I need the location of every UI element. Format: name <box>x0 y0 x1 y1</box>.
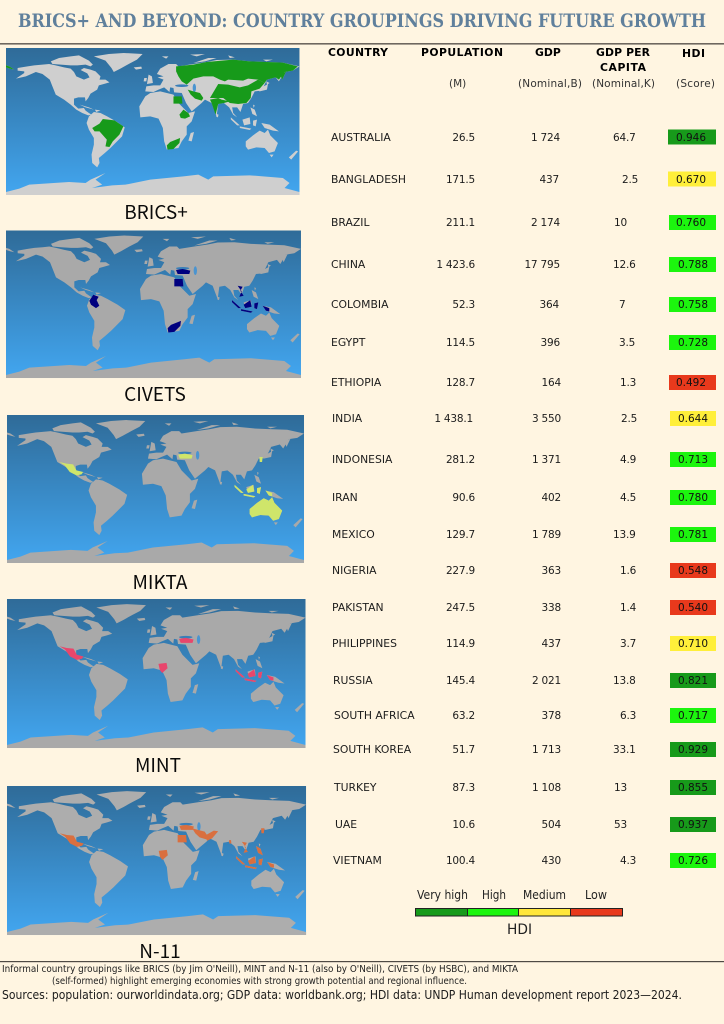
HDI legend: High <box>482 887 506 902</box>
row: UAE: 10.6 <box>452 819 476 831</box>
row: China: 1 423.6 <box>436 259 476 271</box>
row: China: 12.6 <box>613 259 636 271</box>
row: Colombia: 7 <box>619 299 625 311</box>
row: Indonesia: 0.713 <box>678 454 708 466</box>
row: Pakistan: 1.4 <box>620 602 637 614</box>
row: Nigeria: 363 <box>542 565 561 577</box>
row: Turkey: 0.855 <box>678 782 708 794</box>
HDI legend <box>416 887 622 938</box>
HDI legend: Very high <box>417 887 468 902</box>
row: Colombia <box>331 297 716 312</box>
row: Iran: 90.6 <box>452 492 476 504</box>
row: Indonesia: INDONESIA <box>332 453 393 466</box>
row: South Africa: 378 <box>542 710 561 722</box>
row: Vietnam: 100.4 <box>446 855 476 867</box>
table header: (Score) <box>676 78 715 90</box>
row: Bangladesh: 437 <box>540 174 559 186</box>
row: Ethiopia <box>331 375 716 390</box>
row: Bangladesh <box>331 172 716 186</box>
panel: N-11 map <box>7 786 306 935</box>
row: Indonesia: 1 371 <box>532 454 561 466</box>
row: Brazil: 10 <box>614 217 627 229</box>
heading: CIVETS: CIVETS <box>124 380 186 407</box>
row: Colombia: 52.3 <box>452 299 475 311</box>
footnote text: (self-formed) highlight emerging economies with strong growth potential and regional influence. <box>52 976 467 987</box>
row: UAE: UAE <box>335 818 357 831</box>
row: Brazil: 211.1 <box>446 217 475 229</box>
row: South Korea <box>333 742 716 757</box>
row: Pakistan: 338 <box>542 602 561 614</box>
row: Vietnam <box>333 853 716 868</box>
row: Egypt: 396 <box>541 337 561 349</box>
table header: COUNTRY <box>328 46 388 59</box>
row: Mexico: 13.9 <box>613 529 636 541</box>
row: India <box>332 411 716 426</box>
row: Turkey: 1 108 <box>532 782 561 794</box>
HDI legend: Medium <box>523 887 566 902</box>
table header: (M) <box>449 78 466 90</box>
table header: (Nominal,K) <box>592 78 655 90</box>
row: Indonesia: 281.2 <box>446 454 475 466</box>
row: Pakistan: PAKISTAN <box>332 601 384 614</box>
row: Ethiopia: 164 <box>542 377 562 389</box>
table header <box>328 46 715 90</box>
row: Australia <box>331 130 716 144</box>
row: Philippines: 114.9 <box>446 638 475 650</box>
row: UAE: 504 <box>542 819 562 831</box>
row: Australia: 1 724 <box>531 132 561 144</box>
row: Brazil: 0.760 <box>676 217 706 229</box>
row: Mexico: 0.781 <box>678 529 708 541</box>
row: Philippines: 437 <box>542 638 561 650</box>
row: Colombia: 364 <box>540 299 560 311</box>
row: Ethiopia: ETHIOPIA <box>331 376 382 389</box>
row: Bangladesh: 171.5 <box>446 174 475 186</box>
row: Russia: 13.8 <box>613 675 636 687</box>
row: India: 0.644 <box>678 413 708 425</box>
row: Bangladesh: 2.5 <box>622 174 638 186</box>
HDI legend: Low <box>585 887 607 902</box>
table header: CAPITA <box>600 61 647 74</box>
row: Mexico: 129.7 <box>446 529 475 541</box>
row: India: 3 550 <box>532 413 561 425</box>
row: Egypt: 3.5 <box>619 337 635 349</box>
row: South Korea: 1 713 <box>532 744 561 756</box>
row: Vietnam: VIETNAM <box>333 854 382 867</box>
row: Australia: 26.5 <box>452 132 475 144</box>
row: Iran: 4.5 <box>620 492 636 504</box>
row: Bangladesh: 0.670 <box>676 174 706 186</box>
row: Ethiopia: 128.7 <box>446 377 475 389</box>
row: Iran <box>332 490 716 505</box>
row: Egypt <box>331 335 716 350</box>
row: China: 0.788 <box>678 259 708 271</box>
row: Russia: RUSSIA <box>333 674 373 687</box>
row: Philippines: 3.7 <box>620 638 636 650</box>
row: UAE <box>335 817 716 832</box>
row: India: INDIA <box>332 412 363 425</box>
table header: GDP PER <box>596 46 651 59</box>
row: South Africa: 63.2 <box>452 710 475 722</box>
row: China: 17 795 <box>524 259 560 271</box>
row: Egypt: 0.728 <box>678 337 708 349</box>
row: India: 1 438.1 <box>434 413 473 425</box>
row: Russia: 2 021 <box>532 675 561 687</box>
row: Ethiopia: 0.492 <box>676 377 706 389</box>
row: Colombia: 0.758 <box>678 299 708 311</box>
panel: MIKTA map <box>7 415 304 563</box>
row: Pakistan <box>332 600 716 615</box>
heading: N-11: N-11 <box>139 937 181 964</box>
row: Turkey: 87.3 <box>452 782 475 794</box>
row: Nigeria: NIGERIA <box>332 564 377 577</box>
row: Egypt: EGYPT <box>331 336 366 349</box>
row: China <box>331 257 716 272</box>
row: Nigeria: 1.6 <box>620 565 637 577</box>
row: India: 2.5 <box>621 413 637 425</box>
row: Egypt: 114.5 <box>446 337 475 349</box>
table header: HDI <box>682 47 705 60</box>
row: Turkey: 13 <box>614 782 627 794</box>
row: Philippines: 0.710 <box>678 638 708 650</box>
row: South Korea: 51.7 <box>452 744 475 756</box>
data table <box>328 46 716 868</box>
row: Bangladesh: BANGLADESH <box>331 173 406 186</box>
row: Turkey <box>333 780 716 795</box>
row: Brazil <box>331 215 716 230</box>
row: Australia: 64.7 <box>613 132 636 144</box>
heading: BRICS+: BRICS+ <box>124 198 188 225</box>
row: South Africa: 6.3 <box>620 710 636 722</box>
row: Mexico: 1 789 <box>532 529 561 541</box>
row: UAE: 53 <box>614 819 627 831</box>
row: Philippines: PHILIPPINES <box>332 637 397 650</box>
row: Russia: 145.4 <box>446 675 476 687</box>
row: Philippines <box>332 636 716 651</box>
panel: CIVETS map <box>6 230 301 378</box>
row: Brazil: 2 174 <box>531 217 561 229</box>
row: Nigeria: 0.548 <box>678 565 708 577</box>
row: UAE: 0.937 <box>678 819 708 831</box>
row: Iran: IRAN <box>332 491 358 504</box>
row: South Korea: 33.1 <box>613 744 636 756</box>
row: Iran: 402 <box>542 492 561 504</box>
table header: POPULATION <box>421 46 503 59</box>
footnote text: Informal country groupings like BRICS (by Jim O'Neill), MINT and N-11 (also by O'Neill), CIVETS (by HSBC), and MIKTA <box>2 964 518 975</box>
row: Pakistan: 0.540 <box>678 602 708 614</box>
row: Russia: 0.821 <box>678 675 708 687</box>
row: Russia <box>333 673 716 688</box>
panel: BRICS+ map <box>6 48 299 195</box>
row: South Africa: 0.717 <box>678 710 708 722</box>
row: Nigeria <box>332 563 716 578</box>
row: South Africa: SOUTH AFRICA <box>334 709 415 722</box>
row: Brazil: BRAZIL <box>331 216 369 229</box>
row: South Korea: SOUTH KOREA <box>333 743 412 756</box>
row: China: CHINA <box>331 258 366 271</box>
row: Vietnam: 4.3 <box>620 855 636 867</box>
row: Mexico <box>332 527 716 542</box>
panel: MINT map <box>7 599 306 748</box>
row: Indonesia <box>332 452 716 467</box>
row: Mexico: MEXICO <box>332 528 375 541</box>
row: Vietnam: 430 <box>542 855 561 867</box>
row: South Africa <box>334 708 716 723</box>
table header: (Nominal,B) <box>518 78 582 90</box>
heading: MINT: MINT <box>135 751 181 778</box>
row: Pakistan: 247.5 <box>446 602 475 614</box>
row: Colombia: COLOMBIA <box>331 298 389 311</box>
footnote text <box>2 964 518 987</box>
heading: MIKTA: MIKTA <box>132 568 188 595</box>
row: South Korea: 0.929 <box>678 744 708 756</box>
row: Ethiopia: 1.3 <box>620 377 636 389</box>
row: Vietnam: 0.726 <box>678 855 708 867</box>
row: Turkey: TURKEY <box>333 781 377 794</box>
table header: GDP <box>535 46 561 59</box>
row: Iran: 0.780 <box>678 492 708 504</box>
row: Nigeria: 227.9 <box>446 565 475 577</box>
row: Australia: 0.946 <box>676 132 706 144</box>
row: Indonesia: 4.9 <box>620 454 636 466</box>
HDI legend: HDI <box>507 922 532 938</box>
row: Australia: AUSTRALIA <box>331 131 391 144</box>
